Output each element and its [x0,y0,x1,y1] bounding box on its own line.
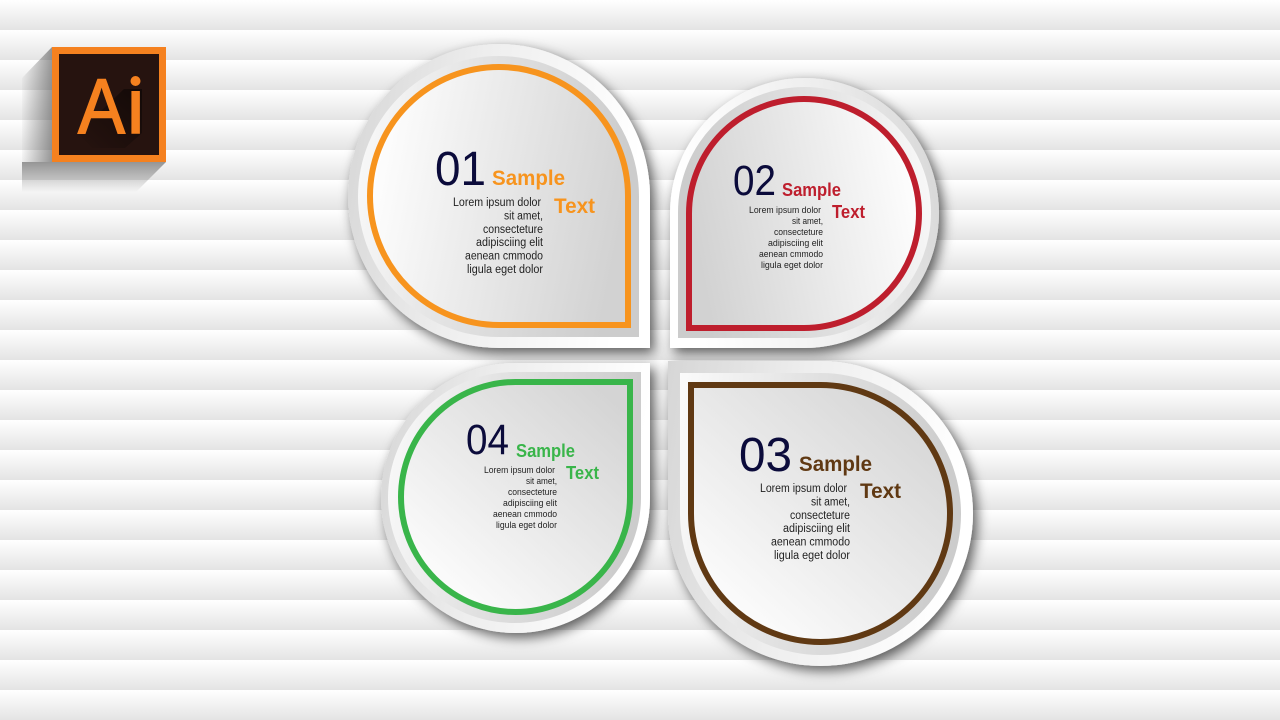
heading: Sample Text [782,180,865,222]
body text: ligula eget dolor [774,550,850,562]
body text: sit amet, [504,210,543,222]
number 04: 04 [466,416,509,464]
body text [484,465,558,531]
heading: Sample Text [799,453,901,503]
body text: Lorem ipsum dolor [749,205,822,216]
icon: Adobe Illustrator logo: i [127,62,144,150]
outline: orange [370,67,628,325]
body text: sit amet, [792,216,823,227]
panel: 04 [381,363,650,633]
body text [453,197,544,276]
body text: consecteture [508,487,557,498]
body text: aenean cmmodo [465,251,543,263]
heading: Sample Text: Text [832,202,865,222]
body text: adipisciing elit [476,237,544,249]
body text: adipisciing elit [768,238,823,249]
body text: adipisciing elit [783,523,851,535]
body text: Lorem ipsum dolor [760,483,847,495]
body text: consecteture [483,224,543,236]
heading: Sample Text [492,167,595,218]
body text: aenean cmmodo [771,537,850,549]
heading: Sample Text [516,441,599,483]
icon: Adobe Illustrator logo: A [78,62,125,150]
heading: Sample Text: Sample [782,180,841,200]
body text: ligula eget dolor [761,260,824,271]
heading: Sample Text: Text [554,195,595,218]
body text: aenean cmmodo [759,249,823,260]
heading: Sample Text: Sample [516,441,575,461]
body text: Lorem ipsum dolor [484,465,556,476]
body text: ligula eget dolor [496,520,558,531]
body text [760,483,851,562]
outline: red [689,99,919,328]
body text: consecteture [790,510,850,522]
heading: Sample Text: Text [566,463,599,483]
panel: 02 [670,78,939,348]
number 01: 01 [435,143,486,196]
panel: 01 [348,44,650,348]
number 03: 03 [739,429,792,482]
body text [749,205,824,271]
body text: sit amet, [526,476,557,487]
icon: Adobe Illustrator logo [22,47,166,192]
body text: ligula eget dolor [467,264,543,276]
body text: aenean cmmodo [493,509,557,520]
outline: brown [691,385,950,642]
outline: green [401,382,630,612]
heading: Sample Text: Sample [492,167,565,190]
heading: Sample Text: Sample [799,453,872,476]
panel: 03 [668,361,973,666]
heading: Sample Text: Text [860,480,901,503]
body text: sit amet, [811,496,850,508]
body text: consecteture [774,227,823,238]
body text: Lorem ipsum dolor [453,197,541,209]
body text: adipisciing elit [503,498,557,509]
number 02: 02 [733,157,776,205]
